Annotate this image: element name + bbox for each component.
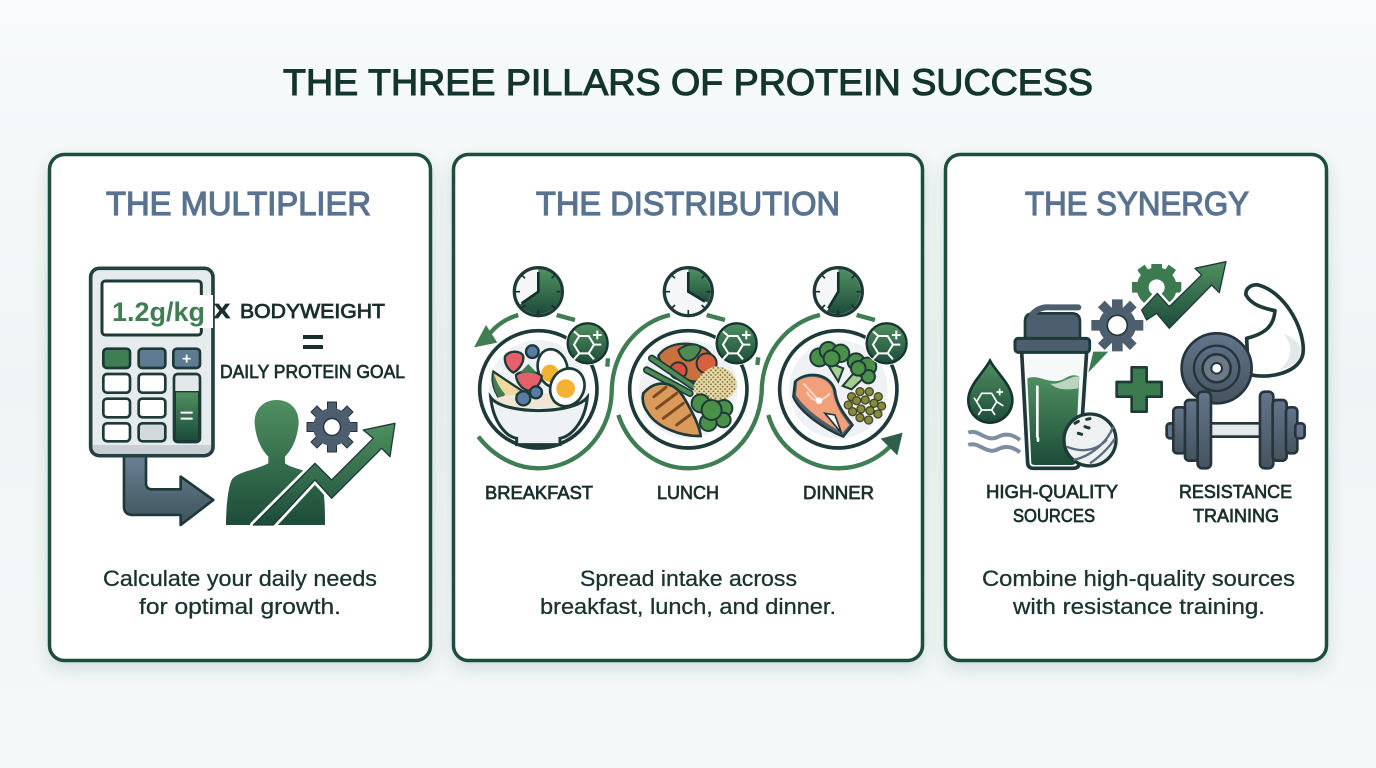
description: multiplier — [103, 566, 377, 619]
label: resistance training: RESISTANCE — [1179, 482, 1292, 502]
plate: lunch — [630, 331, 747, 448]
heading: the distribution: THE DISTRIBUTION — [536, 185, 840, 222]
card: distribution — [454, 154, 922, 660]
description: synergy — [982, 566, 1295, 619]
clock: lunch — [664, 268, 712, 316]
panel: the distribution — [454, 154, 922, 660]
label: high-quality sources: SOURCES — [1013, 506, 1095, 526]
formula: times bodyweight: X — [214, 301, 231, 323]
description: distribution — [540, 566, 836, 619]
icon: protein droplet — [968, 361, 1012, 423]
icon: flow arrow — [124, 453, 213, 525]
icon: synergy growth arrow — [1142, 262, 1226, 328]
meal labels: BREAKFAST — [485, 483, 593, 503]
icon: person silhouette — [226, 400, 325, 525]
description: multiplier: Calculate your daily needs — [103, 566, 377, 591]
label: high-quality sources: HIGH-QUALITY — [986, 482, 1118, 502]
icon: growth arrow — [253, 423, 395, 525]
plate: breakfast — [480, 331, 597, 448]
clock: dinner — [814, 268, 862, 316]
heading: the multiplier: THE MULTIPLIER — [106, 185, 371, 222]
icon: gear — [307, 402, 357, 452]
formula: times bodyweight: BODYWEIGHT — [240, 301, 385, 323]
icon: dumbbell — [1167, 392, 1305, 468]
icon: slate gear — [1091, 299, 1143, 351]
meal labels: LUNCH — [657, 483, 719, 503]
description: synergy: with resistance training. — [1012, 594, 1265, 619]
label: high-quality sources — [986, 482, 1118, 526]
card: multiplier — [50, 154, 430, 660]
card: synergy — [946, 154, 1326, 660]
label: resistance training: TRAINING — [1193, 506, 1279, 526]
icon: weight plate — [1182, 333, 1252, 403]
icon: calculator — [91, 268, 213, 456]
clock: breakfast — [514, 268, 562, 316]
icon: waves — [968, 432, 1020, 452]
screen label patch — [106, 295, 213, 328]
title: THE THREE PILLARS OF PROTEIN SUCCESS — [283, 62, 1093, 103]
icon: plus sign — [1117, 367, 1162, 412]
label: resistance training — [1179, 482, 1292, 526]
icon: ball — [1064, 414, 1116, 466]
badge: breakfast molecule — [566, 321, 610, 365]
meal illustration group — [474, 268, 909, 468]
plate: dinner — [780, 331, 897, 448]
badge: dinner molecule — [865, 321, 909, 365]
description: distribution: breakfast, lunch, and dinner. — [540, 594, 836, 619]
description: distribution: Spread intake across — [580, 566, 797, 591]
icon: protein shaker — [1015, 307, 1090, 468]
meal labels: DINNER — [803, 483, 874, 503]
description: multiplier: for optimal growth. — [139, 594, 341, 619]
formula: equals sign — [303, 335, 323, 349]
synergy illustration group — [968, 262, 1305, 468]
icon: flexed arm — [1246, 285, 1303, 376]
badge: lunch molecule — [715, 321, 759, 365]
panel: the synergy — [946, 154, 1326, 660]
heading: the synergy: THE SYNERGY — [1025, 185, 1249, 222]
icon: small green pointer — [1088, 352, 1108, 373]
arrows: meal timeline — [474, 315, 903, 468]
description: synergy: Combine high-quality sources — [982, 566, 1295, 591]
meal labels — [485, 483, 874, 503]
panel: the multiplier — [50, 154, 430, 660]
formula: daily protein goal: DAILY PROTEIN GOAL — [220, 362, 405, 382]
formula: 1.2g/kg: 1.2g/kg — [112, 297, 205, 327]
icon: green gear — [1132, 264, 1181, 301]
